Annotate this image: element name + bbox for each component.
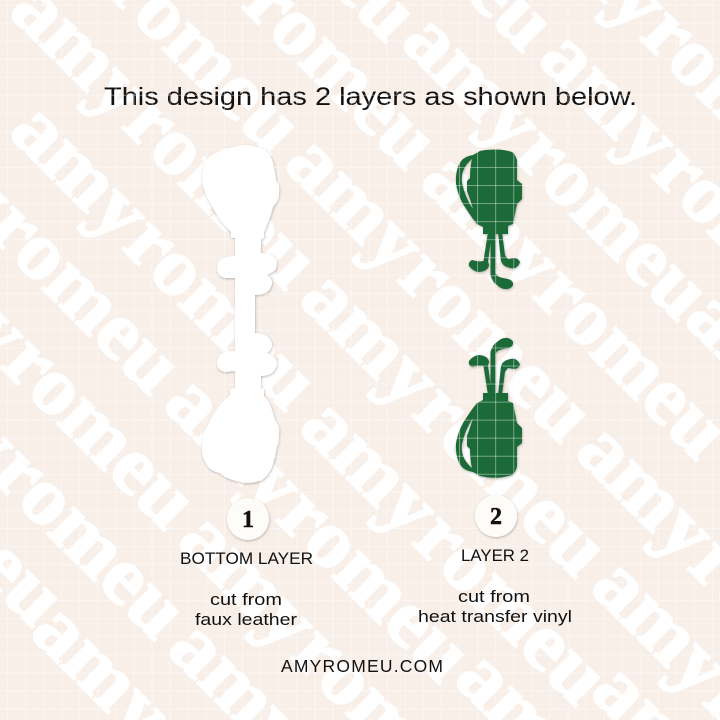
label: bottom layer: BOTTOM LAYER: [180, 549, 313, 568]
watermark: repeated amy romeu: amy romeu: [284, 378, 628, 720]
badge 2: [475, 495, 517, 537]
clubs: [469, 338, 520, 395]
watermark: repeated amy romeu: amy romeu: [148, 355, 492, 699]
title: This design has 2 layers as shown below.: [104, 83, 637, 111]
badge 1: [227, 498, 269, 540]
website url: AMYROMEU.COM: [281, 656, 443, 676]
label: cut from faux leather: [195, 590, 297, 629]
label: cut from faux leather: faux leather: [195, 610, 297, 629]
label: cut from heat transfer vinyl: cut from: [458, 587, 530, 606]
label: cut from faux leather: cut from: [210, 590, 282, 609]
badge 1: 1: [242, 507, 254, 533]
layer 2 green golf bag, bottom: [456, 338, 522, 478]
badge 2: 2: [490, 504, 502, 530]
watermark: repeated amy romeu: amy romeu: [269, 115, 613, 459]
bag body and strap: [456, 149, 522, 234]
watermark: repeated amy romeu: amy romeu: [284, 250, 628, 594]
clubs: [469, 232, 520, 289]
bottom layer white shape: [202, 145, 279, 483]
watermark: repeated amy romeu: amy romeu: [0, 83, 338, 427]
bag body and strap: [456, 393, 522, 478]
label: cut from heat transfer vinyl: [418, 587, 572, 626]
label: cut from heat transfer vinyl: heat transfer vinyl: [418, 607, 572, 626]
layer 2 green golf bag, top (flipped): [456, 149, 522, 289]
label: layer 2: LAYER 2: [461, 546, 529, 565]
